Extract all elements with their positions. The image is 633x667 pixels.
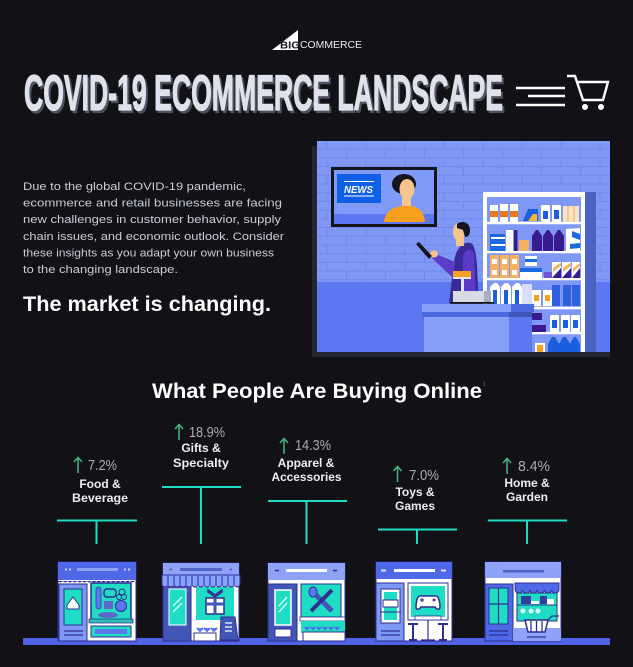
- logo: BigCommerce: BIG: [280, 40, 300, 52]
- cashier: [416, 222, 494, 304]
- logo: BigCommerce: [272, 30, 362, 52]
- storefront: toys: [376, 562, 452, 641]
- subheading: the market is changing: The market is changing.: [23, 293, 271, 316]
- stat: food & beverage: 7.2%: [88, 458, 117, 474]
- television: [331, 167, 437, 227]
- stat: apparel & accessories: 14.3%: [295, 438, 331, 454]
- storefront: home and garden: [485, 562, 561, 641]
- stat: gifts & specialty: [162, 424, 241, 544]
- heading: what people are buying online: What People Are Buying Online: [152, 380, 482, 403]
- stat: home & garden: Garden: [506, 490, 548, 504]
- products: row two: [490, 228, 580, 251]
- cash register: [450, 271, 494, 304]
- stat: toys & games: Games: [395, 499, 435, 513]
- stat: apparel & accessories: [268, 438, 347, 544]
- stat: gifts & specialty: 18.9%: [189, 425, 225, 441]
- stat: apparel & accessories: Apparel &: [278, 456, 335, 470]
- intro paragraph: these insights as you adapt your own business: [23, 248, 274, 260]
- products: row one: [490, 204, 579, 222]
- shelves: [483, 192, 596, 352]
- products: row six: [535, 337, 580, 352]
- intro paragraph: ecommerce and retail businesses are facing: [23, 198, 282, 210]
- television: NEWS: [344, 185, 373, 196]
- intro paragraph: new challenges in customer behavior, supply: [23, 214, 281, 226]
- illustration: store with news on TV: [312, 141, 610, 357]
- products: row three: [490, 255, 580, 278]
- ground bar: [23, 638, 610, 645]
- awning: [162, 575, 240, 587]
- intro paragraph: to the changing landscape.: [23, 264, 178, 276]
- awning: [515, 583, 559, 593]
- stat: toys & games: 7.0%: [409, 468, 439, 484]
- stat: gifts & specialty: Gifts &: [181, 441, 221, 455]
- intro paragraph: chain issues, and economic outlook. Consider: [23, 231, 284, 243]
- stat: food & beverage: Food &: [79, 477, 121, 491]
- stat: toys & games: Toys &: [395, 485, 435, 499]
- stat: food & beverage: [57, 458, 137, 544]
- logo: BigCommerce: COMMERCE: [300, 39, 362, 51]
- stat: home & garden: 8.4%: [518, 459, 550, 475]
- storefront: food: [58, 562, 136, 641]
- stat: home & garden: [488, 458, 567, 544]
- intro paragraph: [23, 181, 284, 276]
- products: row four: [490, 283, 580, 306]
- stat: gifts & specialty: Specialty: [173, 456, 229, 470]
- stat: toys & games: [378, 466, 457, 544]
- storefront: apparel: [268, 563, 345, 641]
- intro paragraph: Due to the global COVID-19 pandemic,: [23, 181, 246, 193]
- stat: apparel & accessories: Accessories: [272, 470, 342, 484]
- icon: speeding shopping cart: [516, 76, 608, 109]
- shopping cart: [525, 620, 548, 632]
- stat: food & beverage: Beverage: [72, 491, 128, 505]
- products: row five: [532, 313, 580, 332]
- heading: what people are buying online: 1: [483, 382, 486, 388]
- counter: [422, 304, 534, 352]
- storefront: gifts: [162, 563, 240, 641]
- stat: home & garden: Home &: [504, 476, 550, 490]
